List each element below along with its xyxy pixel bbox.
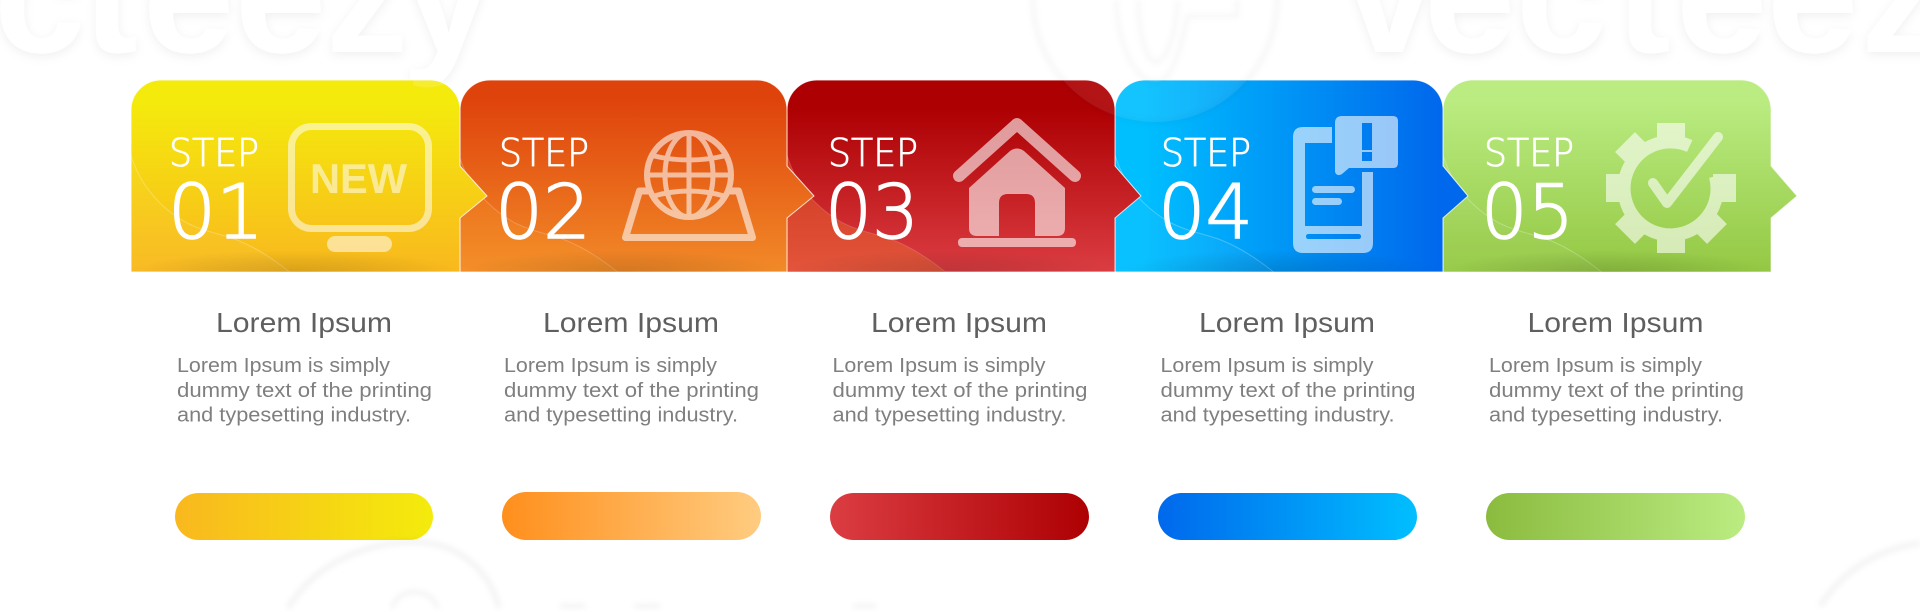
pill bar 5 <box>1486 493 1745 540</box>
step 4 number: 04 <box>1158 168 1253 256</box>
column 2 text: and typesetting industry. <box>504 404 738 426</box>
column 1 text: dummy text of the printing <box>177 380 432 402</box>
column 1 text <box>177 307 432 426</box>
column 5 text: dummy text of the printing <box>1489 380 1744 402</box>
column 4 text <box>1160 307 1416 426</box>
pill bar 4 <box>1158 493 1417 540</box>
column 5 text <box>1489 307 1744 426</box>
column 5 text: and typesetting industry. <box>1489 404 1723 426</box>
watermark: letter tail over step 1 <box>413 80 450 87</box>
column 5 text: Lorem Ipsum <box>1528 307 1704 338</box>
panel: step 5 banner <box>1443 80 1797 272</box>
column 3 text: Lorem Ipsum <box>871 307 1047 338</box>
step 3 number: 03 <box>825 168 919 256</box>
panel: step 3 banner <box>787 80 1142 272</box>
icon: globe on map <box>626 133 752 238</box>
column 4 text: Lorem Ipsum <box>1199 307 1375 338</box>
panel: step 2 banner <box>460 80 815 272</box>
icon: monitor with NEW <box>292 126 428 252</box>
step 2 label: STEP <box>499 131 589 175</box>
column 4 text: Lorem Ipsum is simply <box>1160 355 1374 377</box>
step 5 label: STEP <box>1484 131 1574 175</box>
column 3 text: dummy text of the printing <box>832 380 1088 402</box>
watermark: top centre logo <box>1033 0 1277 122</box>
column 4 text: dummy text of the printing <box>1160 380 1416 402</box>
icon: phone with alert bubble <box>1293 116 1398 253</box>
step 1 label: STEP <box>169 131 259 175</box>
column 2 text: dummy text of the printing <box>504 380 759 402</box>
pill bar 2 <box>502 492 761 540</box>
pill bar 1 <box>175 493 433 540</box>
column 2 text: Lorem Ipsum <box>543 307 719 338</box>
column 2 text: Lorem Ipsum is simply <box>504 355 717 377</box>
icon: gear with check mark <box>1606 123 1736 253</box>
column 1 text: Lorem Ipsum is simply <box>177 355 390 377</box>
column 5 text: Lorem Ipsum is simply <box>1489 355 1702 377</box>
panel: step 4 banner <box>1115 80 1469 272</box>
column 1 text: Lorem Ipsum <box>216 307 392 338</box>
column 3 text: and typesetting industry. <box>832 404 1066 426</box>
column 3 text <box>832 307 1088 426</box>
watermark: bottom left logo <box>288 542 876 608</box>
watermark: bottom right logo <box>1820 543 1920 606</box>
step 1 number: 01 <box>168 168 264 256</box>
step 4 label: STEP <box>1161 131 1251 175</box>
icon: monitor with NEW: NEW <box>310 155 407 202</box>
step 5 number: 05 <box>1481 168 1574 256</box>
pill bar 3 <box>830 493 1089 540</box>
column 2 text <box>504 307 759 426</box>
column 1 text: and typesetting industry. <box>177 404 411 426</box>
panel: step 1 banner <box>131 80 488 272</box>
icon: house <box>958 124 1076 247</box>
step 2 number: 02 <box>495 168 591 256</box>
column 4 text: and typesetting industry. <box>1160 404 1394 426</box>
column 3 text: Lorem Ipsum is simply <box>832 355 1046 377</box>
step 3 label: STEP <box>828 131 918 175</box>
